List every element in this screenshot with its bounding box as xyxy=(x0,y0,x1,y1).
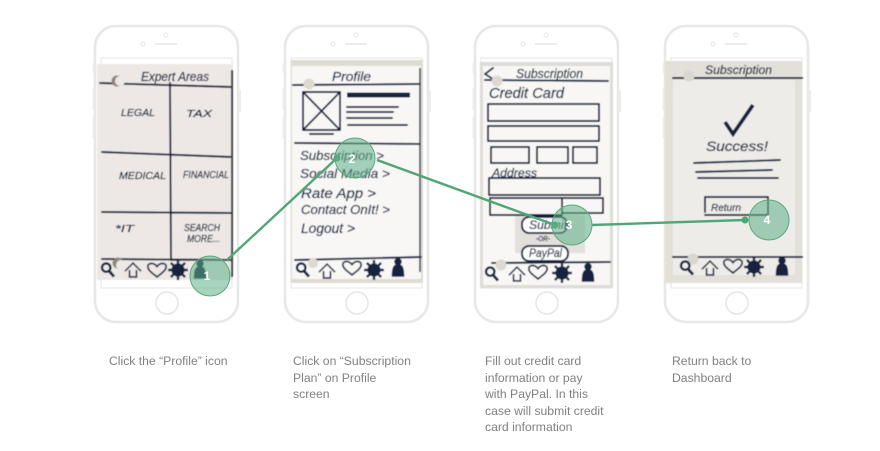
caption: step 3: with PayPal. In this xyxy=(484,387,588,401)
paper sketch: expert areas xyxy=(97,64,233,280)
paper sketch: success: Success! xyxy=(706,138,768,154)
marker 1 xyxy=(190,256,230,296)
paper sketch: credit card form: Subscription xyxy=(516,66,583,81)
paper sketch: expert areas: TAX xyxy=(186,108,213,120)
caption: step 4: Return back to xyxy=(672,354,751,368)
paper sketch: expert areas: MEDICAL xyxy=(119,170,166,182)
phone 2: profile screen xyxy=(282,26,431,322)
marker 4 xyxy=(749,200,789,240)
caption: step 3: Fill out credit card xyxy=(485,354,581,368)
paper sketch: expert areas: FINANCIAL xyxy=(183,170,229,181)
marker 2: 2 xyxy=(349,152,356,166)
paper sketch: credit card form: Address xyxy=(491,166,537,180)
paper sketch: expert areas: SEARCH xyxy=(184,223,221,234)
phone 1: expert areas screen xyxy=(92,26,241,322)
paper sketch: success: Return xyxy=(711,202,741,214)
paper sketch: profile: Profile xyxy=(332,69,371,84)
paper sketch: credit card form: PayPal xyxy=(529,246,562,260)
paper sketch: credit card form: -OR- xyxy=(536,236,551,243)
phone 3: credit card screen xyxy=(472,26,621,322)
paper sketch: profile xyxy=(291,60,423,283)
paper sketch: profile: Subscription > xyxy=(300,148,384,163)
paper sketch: success xyxy=(665,61,802,283)
caption: step 3: case will submit credit xyxy=(485,404,604,418)
paper sketch: expert areas: Expert Areas xyxy=(141,70,209,84)
paper sketch: profile: Rate App > xyxy=(301,186,376,201)
marker 4: 4 xyxy=(764,213,771,227)
caption: step 4: Dashboard xyxy=(672,371,732,385)
caption: step 2: screen xyxy=(293,387,330,401)
marker 1: 1 xyxy=(204,269,211,283)
paper sketch: profile: Logout > xyxy=(301,221,355,236)
marker 3 xyxy=(552,205,592,245)
caption: step 3: information or pay xyxy=(485,371,583,385)
paper sketch: success: Subscription xyxy=(705,63,772,77)
caption: step 2: Click on “Subscription xyxy=(293,354,411,368)
caption: step 2: Plan” on Profile xyxy=(293,371,377,385)
paper sketch: credit card form: Credit Card xyxy=(489,86,565,102)
paper sketch: profile: Contact OnIt! > xyxy=(301,202,390,217)
paper sketch: credit card form xyxy=(480,62,613,288)
arrow: step 3 to step 4 xyxy=(592,216,748,225)
marker 2 xyxy=(335,138,375,178)
caption: step 3: card information xyxy=(485,420,572,434)
paper sketch: profile: Social Media > xyxy=(300,166,390,181)
caption: step 1: Click the “Profile” icon xyxy=(109,354,228,368)
paper sketch: expert areas: MORE... xyxy=(187,234,220,245)
paper sketch: expert areas: LEGAL xyxy=(121,107,155,119)
arrow: step 2 to step 3 xyxy=(377,160,558,228)
paper sketch: expert areas: *IT xyxy=(115,223,136,235)
phone 4: success screen xyxy=(662,26,811,322)
paper sketch: credit card form: Submit xyxy=(529,218,568,232)
arrow: step 1 to step 2 xyxy=(227,154,340,260)
marker 3: 3 xyxy=(566,218,573,232)
